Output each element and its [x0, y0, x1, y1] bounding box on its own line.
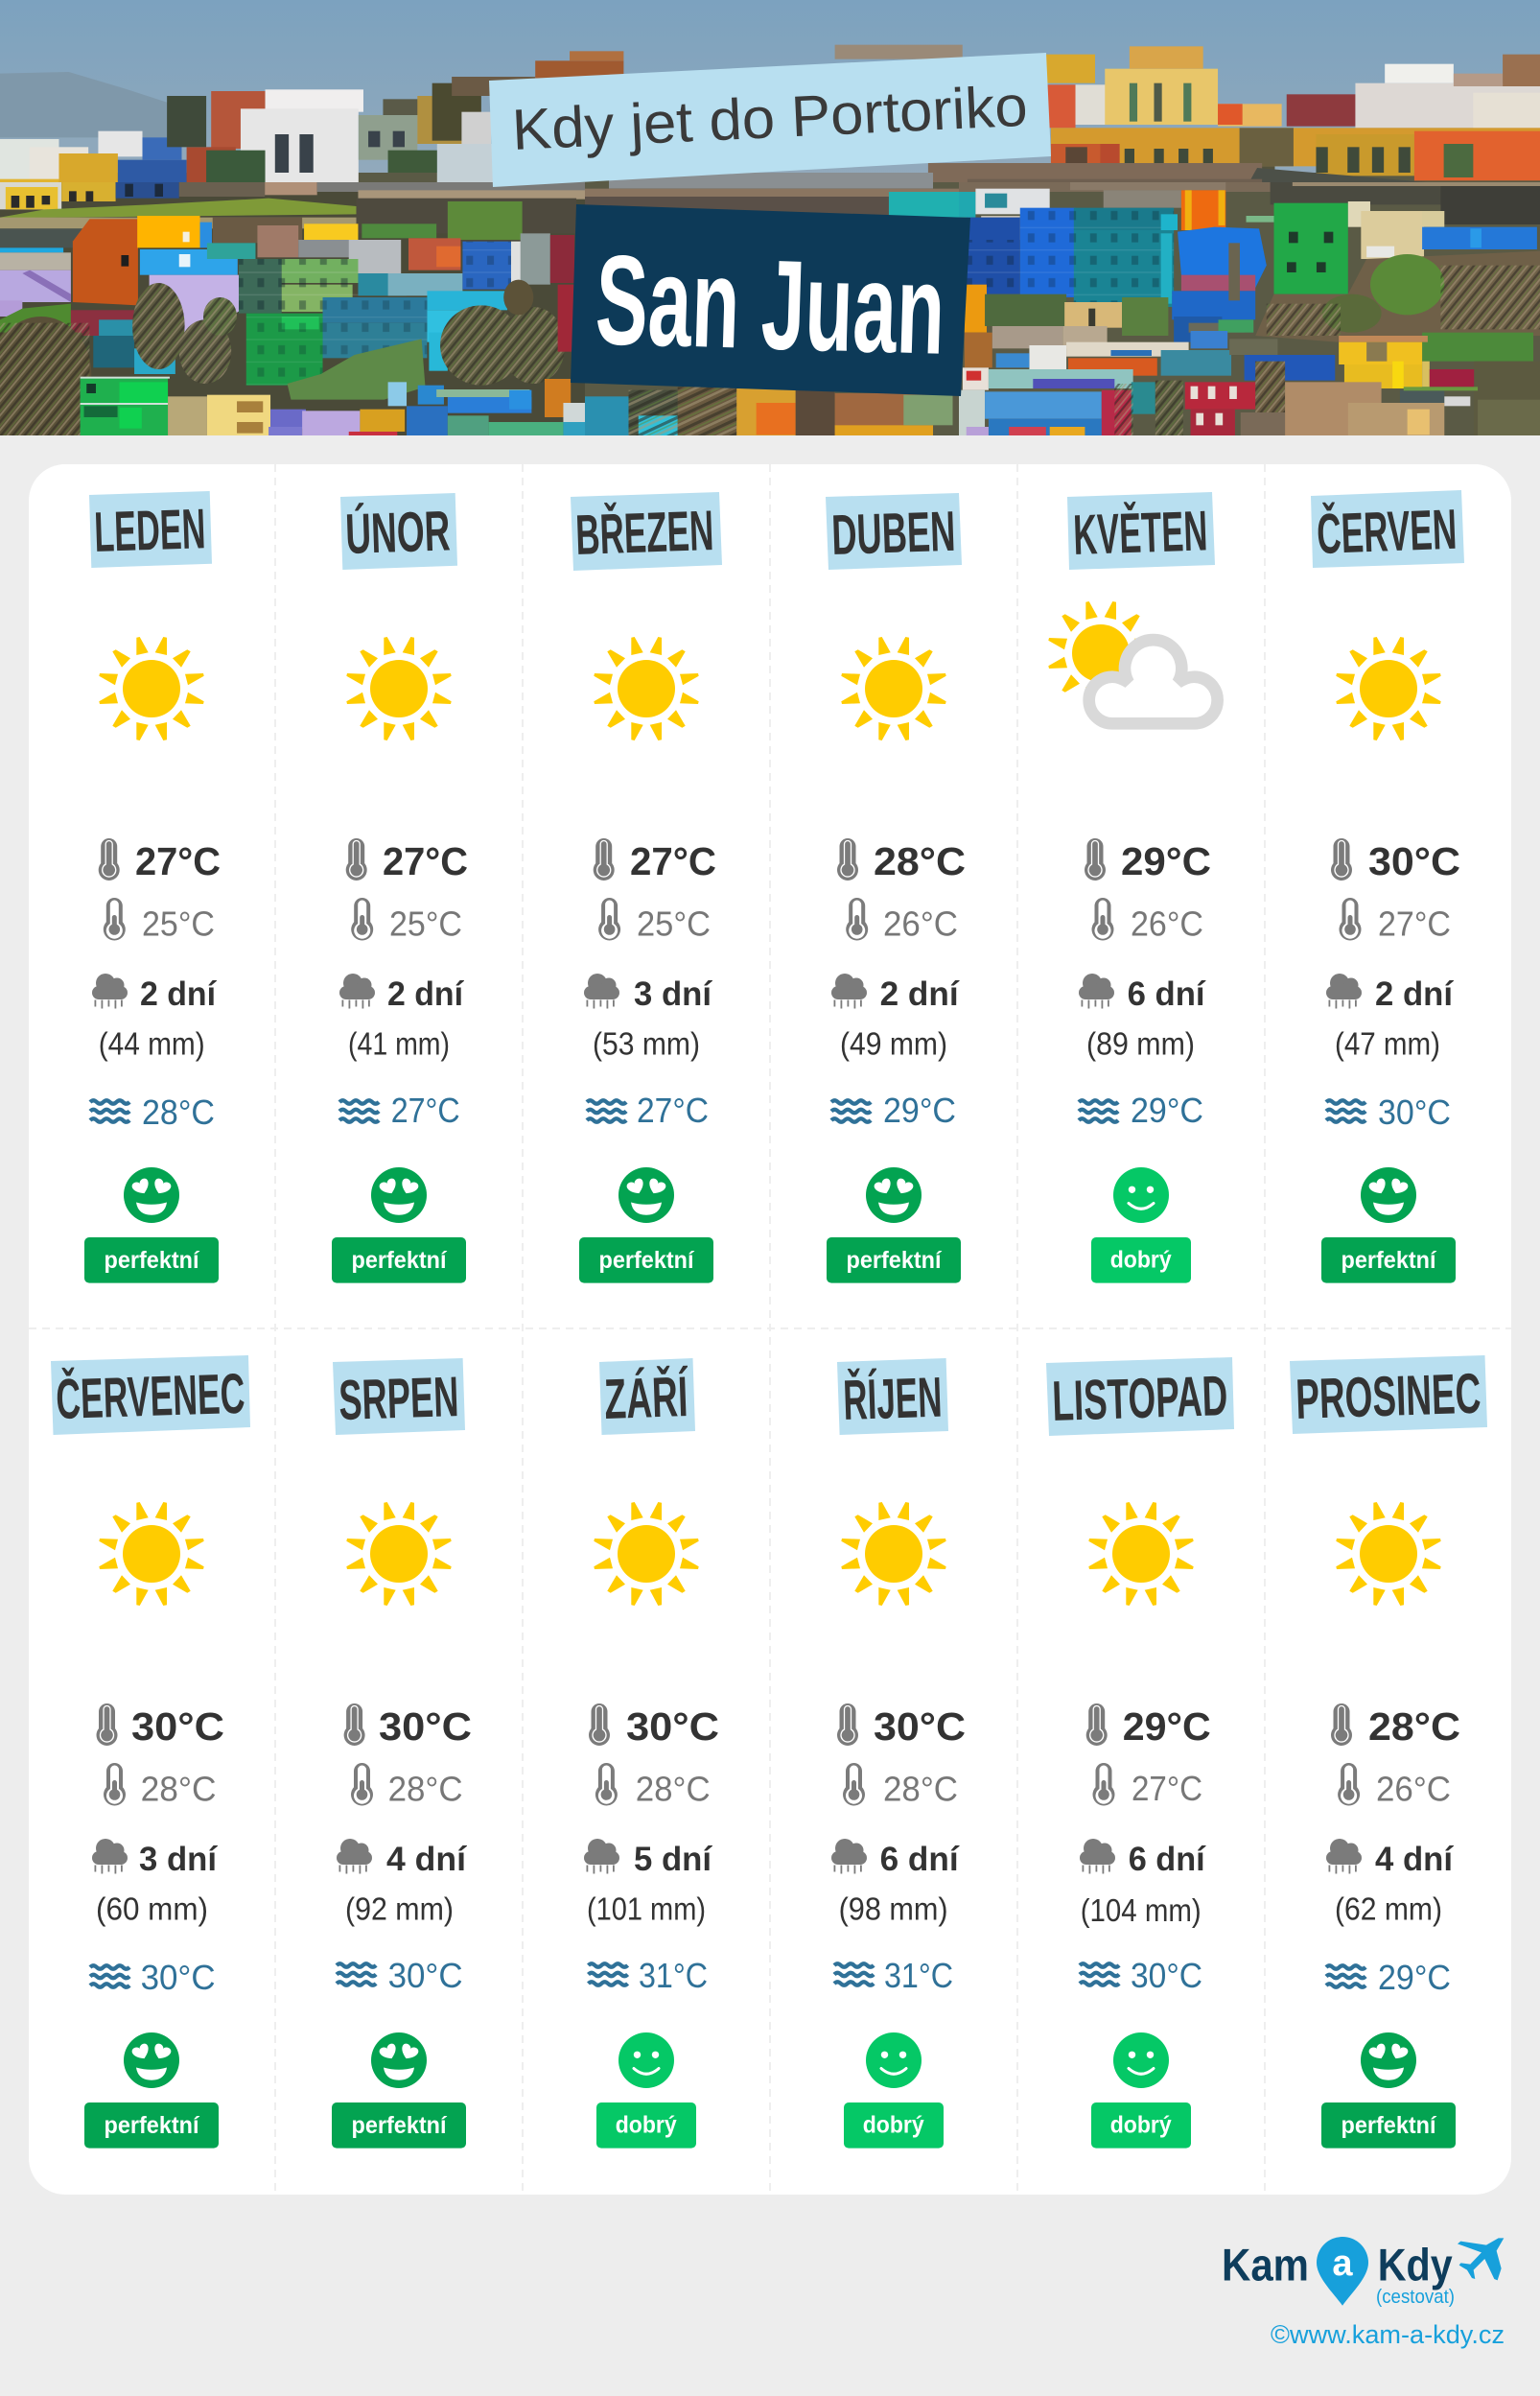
rainfall: (89 mm)	[1086, 1026, 1195, 1062]
hero detail: lower left hillside	[0, 182, 585, 435]
rain days	[1326, 1839, 1454, 1878]
rating face	[866, 1167, 922, 1223]
icon: sun	[346, 637, 452, 740]
rain days: 2 dní	[1375, 975, 1454, 1013]
rain days	[92, 974, 217, 1013]
rainfall: (53 mm)	[593, 1026, 700, 1062]
month: červenec	[51, 1355, 250, 2149]
rain days: 4 dní	[1375, 1841, 1454, 1878]
sea temperature: 29°C	[1131, 1091, 1203, 1130]
sea temperature	[589, 1956, 708, 1995]
month: červen	[1311, 490, 1464, 1283]
month: březen	[571, 492, 722, 1283]
min temperature: 28°C	[388, 1770, 463, 1809]
rating face	[1361, 1167, 1416, 1223]
rain days	[1080, 1839, 1206, 1878]
title banner: San Juan	[571, 204, 970, 396]
max temperature	[837, 1703, 966, 1749]
rainfall: (104 mm)	[1081, 1892, 1202, 1928]
sea temperature: 28°C	[142, 1092, 215, 1132]
rain days: 4 dní	[386, 1841, 467, 1878]
rain days	[1079, 974, 1206, 1013]
sea temperature	[90, 1958, 216, 1997]
max temperature: 27°C	[383, 839, 468, 883]
sea temperature	[337, 1956, 463, 1995]
rating badge: dobrý	[1110, 2111, 1172, 2138]
rating badge	[332, 2102, 466, 2149]
sea temperature: 30°C	[1378, 1092, 1451, 1132]
min temperature	[351, 1763, 463, 1809]
heading	[571, 492, 722, 571]
icon: location pin	[1317, 2237, 1368, 2306]
sea temperature	[1326, 1092, 1451, 1132]
heading: ŘÍJEN	[842, 1365, 943, 1432]
icon: sun	[99, 637, 204, 740]
title banner: Kdy jet do Portoriko	[489, 53, 1051, 187]
heading: SRPEN	[338, 1365, 459, 1432]
logo: Kam a Kdy: Kdy	[1378, 2240, 1453, 2290]
hero detail: lower right hillside	[959, 182, 1540, 435]
max temperature	[837, 838, 966, 883]
max temperature: 30°C	[626, 1704, 719, 1749]
sea temperature: 27°C	[637, 1091, 709, 1130]
heading	[89, 491, 212, 568]
rain days: 3 dní	[634, 975, 712, 1013]
heading	[51, 1355, 250, 1435]
rain days	[584, 974, 712, 1013]
sea temperature: 31°C	[884, 1956, 953, 1995]
rating face	[618, 2032, 674, 2088]
rainfall: (98 mm)	[839, 1891, 948, 1927]
rating face	[1361, 2032, 1416, 2088]
hero photo: colourful San Juan hillside	[0, 0, 1540, 435]
icon: sun	[1336, 637, 1441, 740]
month: únor	[332, 493, 468, 1283]
min temperature	[1093, 1763, 1202, 1808]
rating badge	[1091, 1237, 1191, 1283]
icon: sun	[594, 637, 699, 740]
heading	[599, 1358, 695, 1435]
min temperature	[595, 1763, 711, 1809]
max temperature	[589, 1703, 719, 1749]
icon: sun	[1336, 1502, 1441, 1606]
month: květen	[1048, 492, 1218, 1283]
logo: Kam a Kdy	[1222, 2237, 1504, 2308]
sea temperature	[339, 1091, 460, 1130]
title banner: Kdy jet do Portoriko: Kdy jet do Portoriko	[510, 74, 1029, 162]
rating badge	[579, 1237, 713, 1283]
min temperature: 27°C	[1132, 1769, 1202, 1808]
heading	[1067, 492, 1215, 570]
rating badge: perfektní	[846, 1247, 942, 1274]
icon: sun	[99, 1502, 204, 1606]
max temperature: 27°C	[630, 839, 716, 883]
min temperature: 26°C	[1131, 904, 1203, 944]
rating badge: perfektní	[351, 1247, 447, 1274]
max temperature: 27°C	[135, 839, 221, 883]
min temperature	[104, 1763, 217, 1809]
rain days	[831, 1839, 960, 1878]
min temperature	[846, 898, 958, 944]
rain days: 2 dní	[387, 975, 464, 1013]
sea temperature: 30°C	[141, 1958, 216, 1997]
month: srpen	[332, 1358, 472, 2149]
min temperature	[104, 898, 215, 944]
max temperature: 30°C	[379, 1704, 472, 1749]
rainfall: (101 mm)	[587, 1891, 706, 1927]
rain days	[337, 1839, 467, 1878]
icon: sun	[346, 1502, 452, 1606]
heading	[837, 1358, 948, 1435]
rating badge: perfektní	[1341, 1247, 1436, 1274]
rating face	[1113, 1167, 1169, 1223]
rating face	[124, 2032, 179, 2088]
rainfall: (60 mm)	[96, 1891, 208, 1927]
min temperature: 26°C	[1376, 1770, 1451, 1809]
min temperature	[1091, 898, 1203, 944]
rating badge	[844, 2102, 944, 2149]
logo: Kam a Kdy: (cestovat)	[1376, 2287, 1455, 2308]
rating badge	[1321, 2102, 1456, 2149]
sea temperature: 29°C	[1378, 1958, 1451, 1997]
heading	[340, 493, 457, 570]
min temperature: 28°C	[141, 1770, 217, 1809]
icon: location pin: a	[1332, 2243, 1353, 2284]
sea temperature	[834, 1956, 953, 1995]
max temperature	[96, 1703, 224, 1749]
rating badge: perfektní	[1341, 2112, 1436, 2139]
rating badge	[827, 1237, 961, 1283]
month: říjen	[831, 1358, 966, 2149]
rain days	[339, 974, 464, 1013]
heading: ČERVENEC	[55, 1361, 245, 1431]
month: listopad	[1046, 1357, 1234, 2149]
rain days: 6 dní	[1129, 1841, 1206, 1878]
month: září	[584, 1358, 719, 2149]
sea temperature: 30°C	[1131, 1956, 1202, 1995]
title banner: San Juan: San Juan	[594, 229, 946, 382]
max temperature: 28°C	[1368, 1704, 1460, 1749]
icon: sun	[841, 1502, 946, 1606]
heading: LISTOPAD	[1051, 1364, 1228, 1433]
max temperature	[346, 838, 468, 883]
icon: sun behind cloud	[1048, 601, 1218, 723]
max temperature: 29°C	[1123, 1704, 1211, 1749]
rating badge: perfektní	[598, 1247, 694, 1274]
max temperature	[344, 1703, 472, 1749]
rating badge: dobrý	[863, 2111, 924, 2138]
max temperature: 30°C	[1368, 839, 1460, 883]
sea temperature	[1326, 1958, 1451, 1997]
month: duben	[826, 493, 966, 1283]
rainfall: (92 mm)	[345, 1891, 454, 1927]
max temperature: 28°C	[874, 839, 966, 883]
heading	[826, 493, 962, 570]
min temperature: 25°C	[637, 904, 711, 944]
min temperature: 25°C	[142, 904, 215, 944]
icon: sun	[594, 1502, 699, 1606]
month grid dividers	[29, 464, 1511, 2195]
rainfall: (44 mm)	[99, 1026, 205, 1062]
rating badge	[332, 1237, 466, 1283]
rainfall: (49 mm)	[840, 1026, 947, 1062]
max temperature: 30°C	[874, 1704, 966, 1749]
sea temperature: 30°C	[388, 1956, 463, 1995]
max temperature: 29°C	[1121, 839, 1211, 883]
icon: airplane	[1458, 2238, 1504, 2280]
heading	[1046, 1357, 1234, 1436]
rain days: 2 dní	[140, 975, 217, 1013]
min temperature	[843, 1763, 958, 1809]
sea temperature	[1080, 1956, 1202, 1995]
max temperature	[1331, 838, 1460, 883]
heading	[1311, 490, 1464, 568]
rating badge	[1091, 2102, 1191, 2149]
max temperature	[594, 838, 716, 883]
sea temperature	[587, 1091, 709, 1130]
max temperature	[1086, 1703, 1211, 1749]
heading: ÚNOR	[344, 499, 451, 566]
rating badge: perfektní	[351, 2112, 447, 2139]
icon: sun	[841, 637, 946, 740]
rating face	[866, 2032, 922, 2088]
rain days	[1326, 974, 1454, 1013]
rain days: 2 dní	[880, 975, 960, 1013]
heading: BŘEZEN	[574, 498, 714, 567]
sea temperature	[90, 1092, 215, 1132]
rating badge	[596, 2102, 696, 2149]
rating face	[618, 1167, 674, 1223]
heading	[333, 1358, 465, 1435]
rating badge: dobrý	[616, 2111, 677, 2138]
rating badge	[84, 2102, 219, 2149]
min temperature: 26°C	[883, 904, 958, 944]
rating face	[124, 1167, 179, 1223]
month: prosinec	[1290, 1355, 1487, 2149]
min temperature	[351, 898, 462, 944]
heading: DUBEN	[830, 500, 956, 567]
rain days: 5 dní	[634, 1841, 712, 1878]
rating badge	[84, 1237, 219, 1283]
sea temperature	[1079, 1091, 1203, 1130]
rating face	[1113, 2032, 1169, 2088]
rain days	[831, 974, 960, 1013]
min temperature	[1338, 1763, 1451, 1809]
rainfall: (62 mm)	[1335, 1891, 1442, 1927]
rainfall: (41 mm)	[348, 1026, 450, 1062]
month: leden	[84, 491, 221, 1283]
min temperature: 28°C	[636, 1770, 711, 1809]
rating badge	[1321, 1237, 1456, 1283]
heading: KVĚTEN	[1072, 498, 1208, 567]
rating face	[371, 1167, 427, 1223]
max temperature	[99, 838, 221, 883]
rain days	[584, 1839, 712, 1878]
sea temperature: 29°C	[883, 1091, 956, 1130]
sea temperature	[831, 1091, 956, 1130]
panel: months card	[29, 464, 1511, 2195]
min temperature	[1339, 898, 1451, 944]
logo: Kam a Kdy: Kam	[1222, 2240, 1309, 2290]
min temperature: 25°C	[389, 904, 462, 944]
sea temperature: 31°C	[639, 1956, 708, 1995]
min temperature: 27°C	[1378, 904, 1451, 944]
min temperature: 28°C	[883, 1770, 958, 1809]
rain days: 6 dní	[880, 1841, 960, 1878]
rain days: 3 dní	[139, 1841, 218, 1878]
heading: ZÁŘÍ	[603, 1364, 689, 1431]
max temperature	[1331, 1703, 1460, 1749]
min temperature	[598, 898, 711, 944]
rating badge: dobrý	[1110, 1247, 1172, 1274]
rating badge: perfektní	[104, 1247, 199, 1274]
max temperature: 30°C	[131, 1704, 224, 1749]
rain days: 6 dní	[1128, 975, 1206, 1013]
website credit: ©www.kam-a-kdy.cz	[1271, 2320, 1505, 2349]
sea temperature: 27°C	[391, 1091, 460, 1130]
heading: LEDEN	[93, 497, 206, 564]
rain days	[92, 1839, 218, 1878]
rainfall: (47 mm)	[1335, 1026, 1440, 1062]
rating badge: perfektní	[104, 2112, 199, 2139]
rating face	[371, 2032, 427, 2088]
icon: sun	[1088, 1502, 1194, 1606]
max temperature	[1085, 838, 1211, 883]
